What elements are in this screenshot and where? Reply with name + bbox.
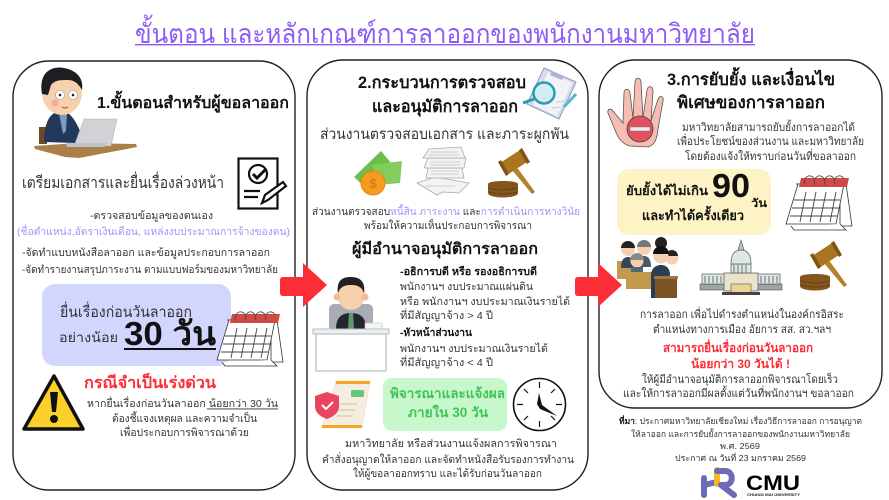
text: exception in red: สามารถยื่นเรื่องก่อนวันลาออก [663,339,813,355]
text: prepare documents: เตรียมเอกสารและยื่นเรื่องล่วงหน้า [22,171,224,192]
text: check own data [17,210,290,238]
text: approver list: พนักงานฯ งบประมาณแผ่นดิน [400,281,533,293]
text: exception in red: น้อยกว่า 30 วันได้ ! [691,356,790,371]
callout: at least 30 days: อย่างน้อย [59,330,118,345]
heading: 3.การยับยั้ง และเงื่อนไข [667,67,835,89]
text: independent organisations [640,306,844,336]
urgent case: กรณีจำเป็นเร่งด่วน [84,371,216,392]
source note: ที่มา: ประกาศมหาวิทยาลัยเชียงใหม่ เรื่องวิธีการลาออก การอนุญาต [619,414,862,427]
text: approver list: ที่มีสัญญาจ้าง > 4 ปี [400,308,493,322]
urgent case [84,371,278,439]
text: prepare forms [22,246,278,276]
panel: deferral and special conditions [599,60,882,408]
icon: man with laptop [34,68,137,158]
arrow: step 2 to 3 [575,263,622,307]
text: approver list: พนักงานฯ งบประมาณเงินรายได้ [400,342,548,355]
text: independent organisations: การลาออก เพื่อไปดำรงตำแหน่งในองค์กรอิสระ [640,306,844,321]
source note: ให้ลาออก และการยับยั้งการลาออกของพนักงานมหาวิทยาลัย [631,428,850,439]
heading: 1.ขั้นตอนสำหรับผู้ขอลาออก [97,90,289,114]
heading: พิเศษของการลาออก [677,93,825,112]
heading: 2.กระบวนการตรวจสอบ [358,74,526,92]
icon: clock [514,378,566,430]
text: approver list: -หัวหน้าส่วนงาน [400,326,473,339]
icon: parliament building [700,240,782,295]
logo: HR CMU [704,470,801,497]
icon: warning triangle [24,376,83,429]
heading [667,67,835,112]
text: approver list: หรือ พนักงานฯ งบประมาณเงินรายได้ [400,295,570,308]
icon: gavel [488,148,535,198]
icon: money: $ [369,176,377,191]
text: result notice: ให้ผู้ขอลาออกทราบ และได้รับก่อนวันลาออก [353,467,542,480]
text: check own data: (ชื่อตำแหน่ง,อัตราเงินเดือน, แหล่งงบประมาณการจ้างของตน) [17,224,290,238]
callout: up to 90 days: และทำได้ครั้งเดียว [642,205,744,223]
text: result notice: มหาวิทยาลัย หรือส่วนงานแจ้งผลการพิจารณา [345,437,557,450]
callout: up to 90 days: 90 [712,167,750,204]
text: documents check: ส่วนงานตรวจสอบเอกสาร และภาระผูกพัน [320,126,569,143]
logo: HR CMU: CHIANG MAI UNIVERSITY [747,493,801,497]
icon: stack of papers [417,147,469,195]
text: approver list: -อธิการบดี หรือ รองอธิการบดี [400,265,537,278]
text: exception in red [663,339,813,371]
icon: politicians at podium [617,237,678,298]
callout: at least 30 days: 30 วัน [124,315,216,352]
icon: gavel [800,241,847,290]
text: expedited approval [623,372,854,400]
text: prepare forms: -จัดทำรายงานสรุปภาระงาน ตามแบบฟอร์มของมหาวิทยาลัย [22,263,278,276]
icon: money [354,151,402,195]
text: result notice: คำสั่งอนุญาตให้ลาออก และจัดทำหนังสือรับรองการทำงาน [322,452,574,466]
text: university may defer [677,119,864,163]
callout: at least 30 days: ยื่นเรื่องก่อนวันลาออก [60,301,192,321]
callout: within 30 days [383,378,507,431]
callout: up to 90 days [617,167,771,235]
callout: up to 90 days: ยับยั้งได้ไม่เกิน [626,181,708,198]
arrow: step 1 to 2 [280,263,327,307]
text: approver list: ที่มีสัญญาจ้าง < 4 ปี [400,355,493,369]
panel: review and approval process [307,60,588,490]
text: unit checks [312,204,580,232]
heading [358,74,526,117]
urgent case: เพื่อประกอบการพิจารณาด้วย [120,425,249,439]
icon: stop hand [608,78,663,147]
icon: man at desk [313,277,389,371]
text: university may defer: โดยต้องแจ้งให้ทราบก่อนวันที่ขอลาออก [685,148,856,163]
panel: steps for the applicant [13,61,295,490]
callout: up to 90 days: วัน [751,197,767,210]
source note: พ.ศ. 2569 [720,441,760,451]
urgent case: ต้องชี้แจงเหตุผล และความจำเป็น [112,411,257,425]
callout: within 30 days: ภายใน 30 วัน [408,404,489,420]
text: result notice [322,437,574,480]
heading: และอนุมัติการลาออก [372,97,518,117]
heading: approver: ผู้มีอำนาจอนุมัติการลาออก [352,240,538,260]
icon: signed document [238,158,286,208]
text: unit checks: พร้อมให้ความเห็นประกอบการพิจารณา [364,218,532,232]
logo: HR CMU: CMU [746,472,800,495]
text: expedited approval: และให้การลาออกมีผลตั้งแต่วันที่พนักงานฯ ขอลาออก [623,385,854,400]
urgent case: หากยื่นเรื่องก่อนวันลาออก น้อยกว่า 30 วัน [87,396,278,410]
icon: clipboard and magnifier [523,68,576,119]
text: check own data: -ตรวจสอบข้อมูลของตนเอง [90,210,213,222]
text: university may defer: เพื่อประโยชน์ของส่วนงาน และมหาวิทยาลัย [677,133,864,148]
text: approver list [400,265,570,369]
callout: within 30 days: พิจารณาและแจ้งผล [390,386,505,401]
text: unit checks: ส่วนงานตรวจสอบหนี้สิน ภาระงาน และการดำเนินการทางวินัย [312,204,580,218]
callout: at least 30 days [42,284,231,366]
text: expedited approval: ให้ผู้มีอำนาจอนุมัติการลาออกพิจารณาโดยเร็ว [642,372,838,386]
icon: calendar [786,176,852,230]
text: university may defer: มหาวิทยาลัยสามารถยับยั้งการลาออกได้ [682,119,855,134]
title: ขั้นตอน และหลักเกณฑ์การลาออกของพนักงานมหาวิทยาลัย [135,14,755,49]
icon: shield and document [315,381,370,428]
source note: ประกาศ ณ วันที่ 23 มกราคม 2569 [675,452,806,463]
text: prepare forms: -จัดทำแบบหนังสือลาออก และข้อมูลประกอบการลาออก [22,246,270,259]
text: independent organisations: ตำแหน่งทางการเมือง อัยการ สส. สว.ฯลฯ [653,323,831,336]
icon: calendar [217,312,283,366]
source note [619,414,862,463]
